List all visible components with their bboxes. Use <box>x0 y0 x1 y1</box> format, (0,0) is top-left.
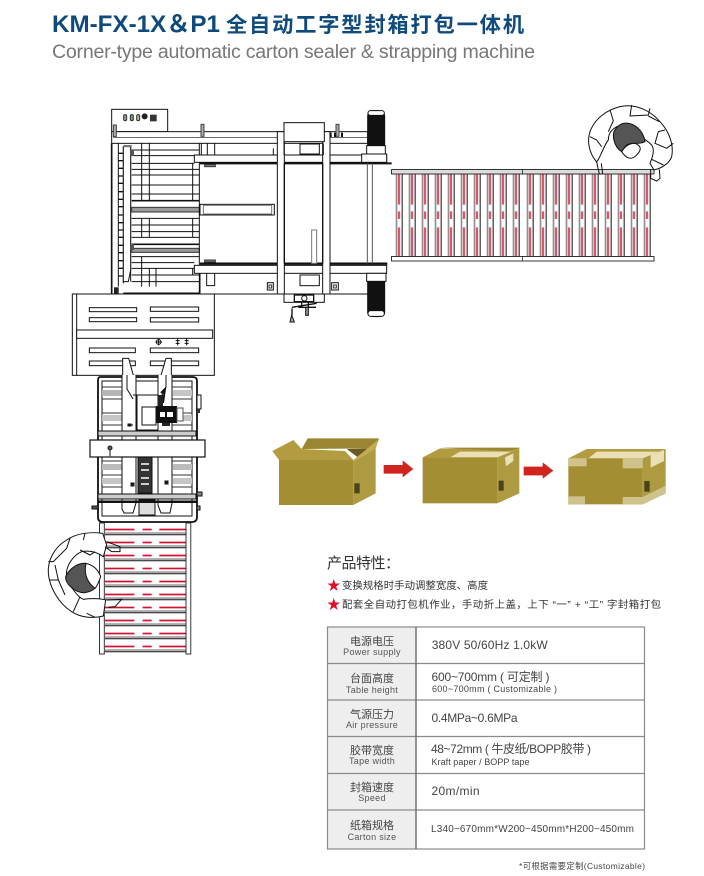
row: speed <box>350 780 480 803</box>
cross band with knob <box>90 440 205 457</box>
row: tape width <box>349 741 591 767</box>
row: carton size: 纸箱规格 <box>350 818 394 832</box>
roller conveyor: right <box>392 170 654 261</box>
feature 1: 变换规格时手动调整宽度、高度 <box>342 579 488 592</box>
machine diagram: strapping unit body <box>90 375 205 522</box>
subtitle: Corner-type automatic carton sealer & strapping machine <box>52 41 535 63</box>
feature 2: ★ <box>327 597 340 612</box>
table shading and grid <box>328 627 644 849</box>
side belts and centre bar <box>194 143 392 294</box>
roller conveyor: bottom <box>100 523 191 654</box>
gantry columns <box>273 123 330 302</box>
slatted infeed section <box>112 143 199 294</box>
box: closed carton <box>423 448 519 503</box>
machine diagram: carton sealer top view <box>112 109 392 322</box>
row: speed: 20m/min <box>432 784 480 798</box>
centre channels <box>122 375 172 513</box>
row: table height: 600~700mm ( 可定制 ) <box>432 669 550 684</box>
strapping track <box>128 424 168 515</box>
title: KM-FX-1X＆P1 <box>52 11 220 38</box>
row: tape width: Kraft paper / BOPP tape <box>432 757 530 767</box>
feature list <box>327 578 661 612</box>
carton process illustration <box>272 438 666 505</box>
cross rails <box>98 431 196 502</box>
row: air pressure: Air pressure <box>346 720 398 730</box>
row: carton size: Carton size <box>348 832 396 842</box>
row: power supply <box>343 634 548 657</box>
row: table height: 台面高度 <box>350 671 394 685</box>
row: table height <box>346 669 557 695</box>
side lugs <box>92 492 202 510</box>
box: open carton <box>272 438 379 505</box>
hand crank <box>290 295 317 322</box>
row: power supply: 380V 50/60Hz 1.0kW <box>432 638 548 652</box>
row: air pressure: 气源压力 <box>350 707 394 721</box>
row: power supply: 电源电压 <box>350 634 394 648</box>
icon: arrow <box>384 460 413 477</box>
top frame bar <box>112 124 368 143</box>
icon: operator bottom left <box>48 533 122 617</box>
features heading: 产品特性： <box>327 555 400 572</box>
row: speed: 封箱速度 <box>350 780 394 794</box>
machine diagram: strapping machine <box>72 294 214 375</box>
control box <box>112 109 168 132</box>
row: air pressure: 0.4MPa~0.6MPa <box>432 711 518 725</box>
box: strapped carton <box>568 449 666 504</box>
icon: operator top right <box>589 105 673 181</box>
row: power supply: Power supply <box>343 647 401 657</box>
outer frame <box>98 377 201 522</box>
side slats <box>102 387 192 495</box>
title <box>52 11 525 38</box>
row: carton size: L340~670mm*W200~450mm*H200~450mm <box>431 824 634 835</box>
row: air pressure <box>346 707 518 730</box>
row: carton size <box>348 818 634 842</box>
spec table <box>328 627 644 849</box>
row: table height: Table height <box>346 685 398 695</box>
feature 1 <box>327 578 488 593</box>
feature 1: ★ <box>327 578 340 593</box>
row: tape width: 胶带宽度 <box>350 743 394 757</box>
footnote: *可根据需要定制(Customizable) <box>519 861 645 871</box>
title: 全自动工字型封箱打包一体机 <box>226 13 525 37</box>
row: tape width: 48~72mm ( 牛皮纸/BOPP胶带 ) <box>431 741 591 756</box>
icon: arrow <box>524 462 553 479</box>
row: tape width: Tape width <box>349 756 395 766</box>
black drive roller bottom <box>367 273 386 317</box>
row: speed: Speed <box>358 793 386 803</box>
black drive roller top <box>362 111 387 162</box>
feature 2: 配套全自动打包机作业，手动折上盖，上下 “一” + “工” 字封箱打包 <box>342 598 661 611</box>
strapping head motor <box>156 395 183 426</box>
cover panel <box>72 294 214 375</box>
row: table height: 600~700mm ( Customizable ) <box>432 684 557 694</box>
